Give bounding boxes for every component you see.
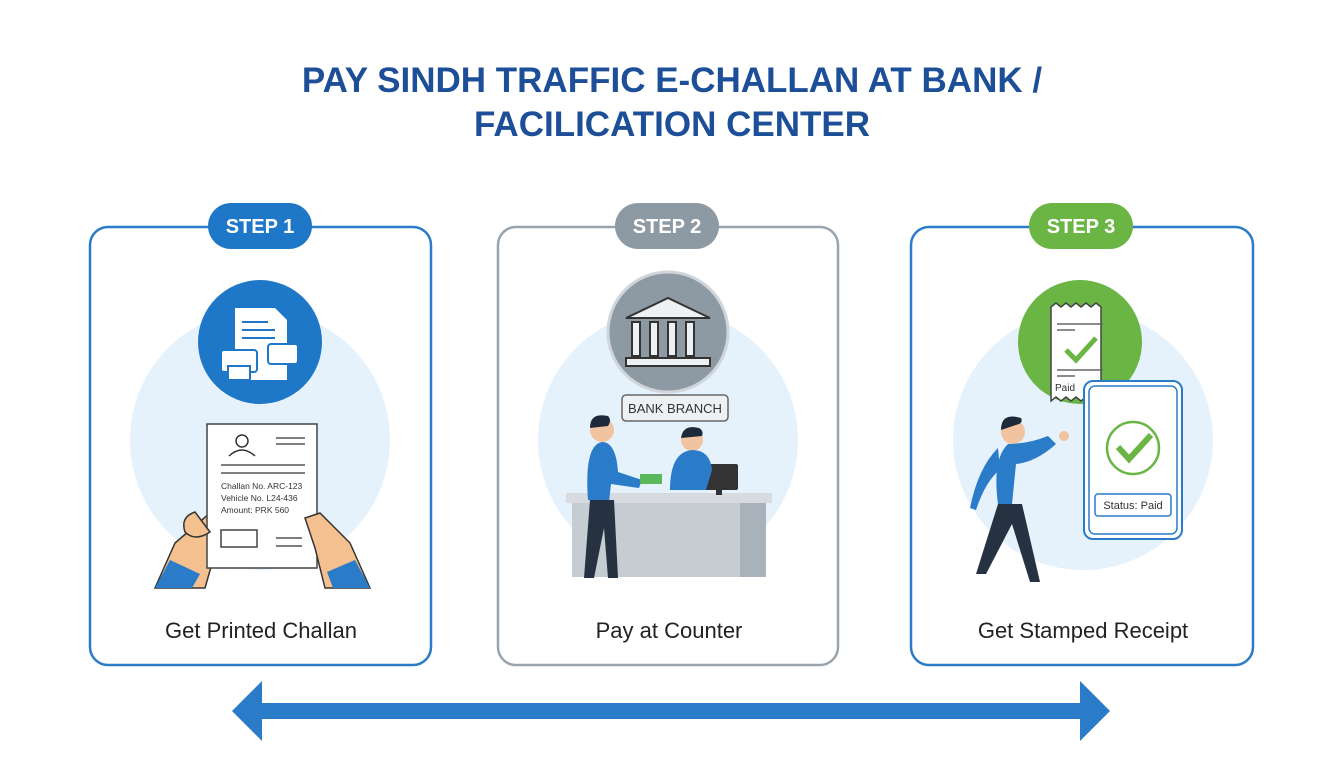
illustration: walking man	[970, 416, 1069, 582]
title	[302, 61, 1042, 144]
arrow: double-headed	[232, 681, 1110, 741]
title: FACILICATION CENTER	[474, 105, 870, 144]
icon: background circle 2	[538, 310, 798, 570]
illustration: printed challan in hands	[155, 424, 370, 588]
icon: background circle 1	[130, 310, 390, 570]
icon: phone status paid: Status: Paid	[1103, 500, 1163, 512]
panel: step 3	[911, 227, 1253, 665]
icon: printer circle	[198, 280, 322, 404]
icon: bank circle	[608, 272, 728, 392]
icon: receipt circle: Paid	[1055, 383, 1075, 394]
panel: step 2	[498, 227, 838, 665]
illustration: printed challan in hands: Vehicle No. L24-436	[221, 493, 298, 503]
sign: bank branch: BANK BRANCH	[628, 401, 722, 416]
label: step 2: Pay at Counter	[596, 618, 742, 643]
step pill 3	[1029, 203, 1133, 249]
label: step 3: Get Stamped Receipt	[978, 618, 1188, 643]
illustration: printed challan in hands: Challan No. ARC-123	[221, 481, 303, 491]
step pill 1: STEP 1	[226, 216, 294, 238]
icon: receipt circle	[1018, 280, 1142, 404]
step pill 2: STEP 2	[633, 216, 701, 238]
title: PAY SINDH TRAFFIC E-CHALLAN AT BANK /	[302, 61, 1042, 100]
panel: step 1	[90, 227, 431, 665]
sign: bank branch	[622, 395, 728, 421]
illustration: printed challan in hands: Amount: PRK 560	[221, 505, 289, 515]
illustration: counter scene	[566, 415, 772, 578]
label: step 1: Get Printed Challan	[165, 618, 357, 643]
step pill 3: STEP 3	[1047, 216, 1115, 238]
step pill 1	[208, 203, 312, 249]
icon: background circle 3	[953, 310, 1213, 570]
step pill 2	[615, 203, 719, 249]
icon: phone status paid	[1084, 381, 1182, 539]
